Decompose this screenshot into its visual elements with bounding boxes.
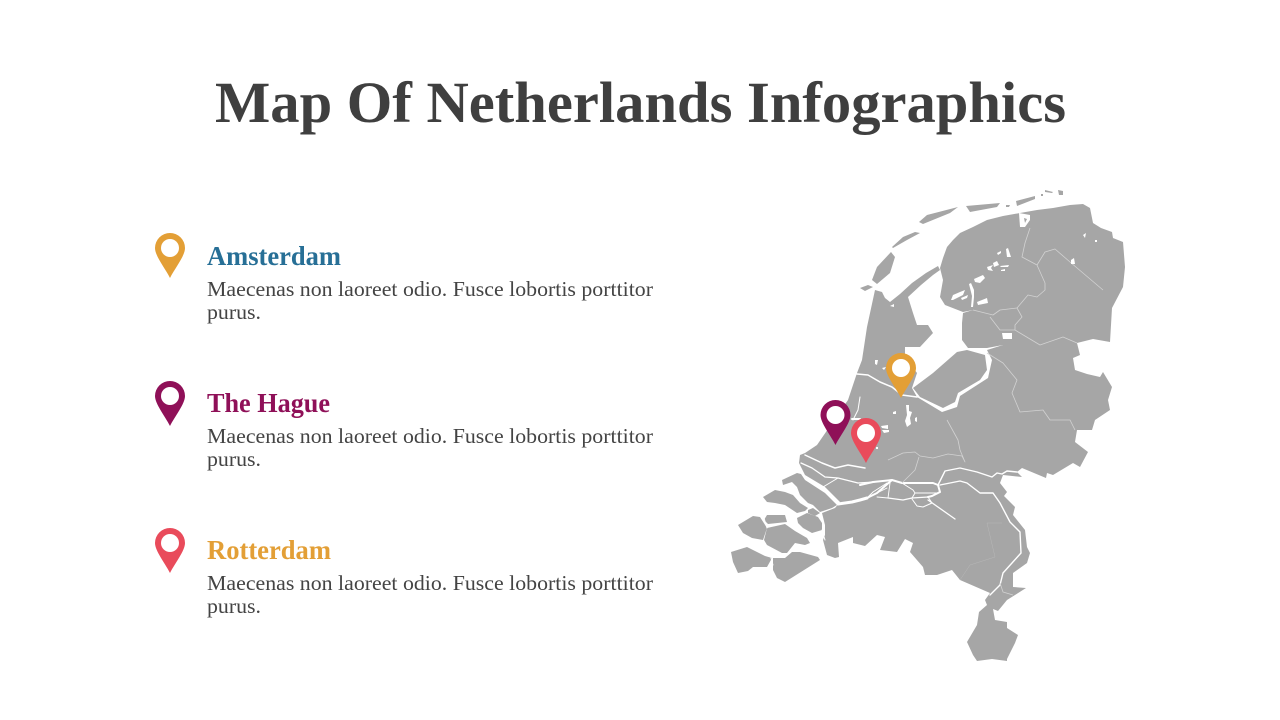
item: The Hague	[155, 381, 653, 471]
icon: red pin	[155, 528, 185, 573]
heading: Amsterdam: Amsterdam	[207, 241, 341, 271]
item: Rotterdam	[155, 528, 653, 618]
text block: Amsterdam description: purus.	[207, 300, 261, 324]
text block: The Hague description: purus.	[207, 447, 261, 471]
lakes and ponds	[875, 213, 1097, 449]
text block: Rotterdam description: Maecenas non laoreet odio. Fusce lobortis porttitor	[207, 571, 653, 595]
text block: Rotterdam description	[207, 571, 653, 618]
text block: Rotterdam description: purus.	[207, 594, 261, 618]
rivers and water	[764, 374, 1021, 595]
map pin: Amsterdam	[886, 353, 916, 398]
heading: The Hague: The Hague	[207, 388, 330, 418]
map of the Netherlands	[731, 190, 1125, 661]
text block: The Hague description: Maecenas non laoreet odio. Fusce lobortis porttitor	[207, 424, 653, 448]
item: Amsterdam	[155, 233, 653, 324]
text block: The Hague description	[207, 424, 653, 471]
map pin: Rotterdam	[851, 418, 881, 463]
title: Map Of Netherlands Infographics	[215, 70, 1066, 135]
text block: Amsterdam description	[207, 277, 653, 324]
map pin: The Hague	[820, 400, 850, 445]
icon: purple pin	[155, 381, 185, 426]
heading: Rotterdam: Rotterdam	[207, 535, 331, 565]
province borders	[888, 228, 1103, 595]
icon: orange pin	[155, 233, 185, 278]
text block: Amsterdam description: Maecenas non laoreet odio. Fusce lobortis porttitor	[207, 277, 653, 301]
